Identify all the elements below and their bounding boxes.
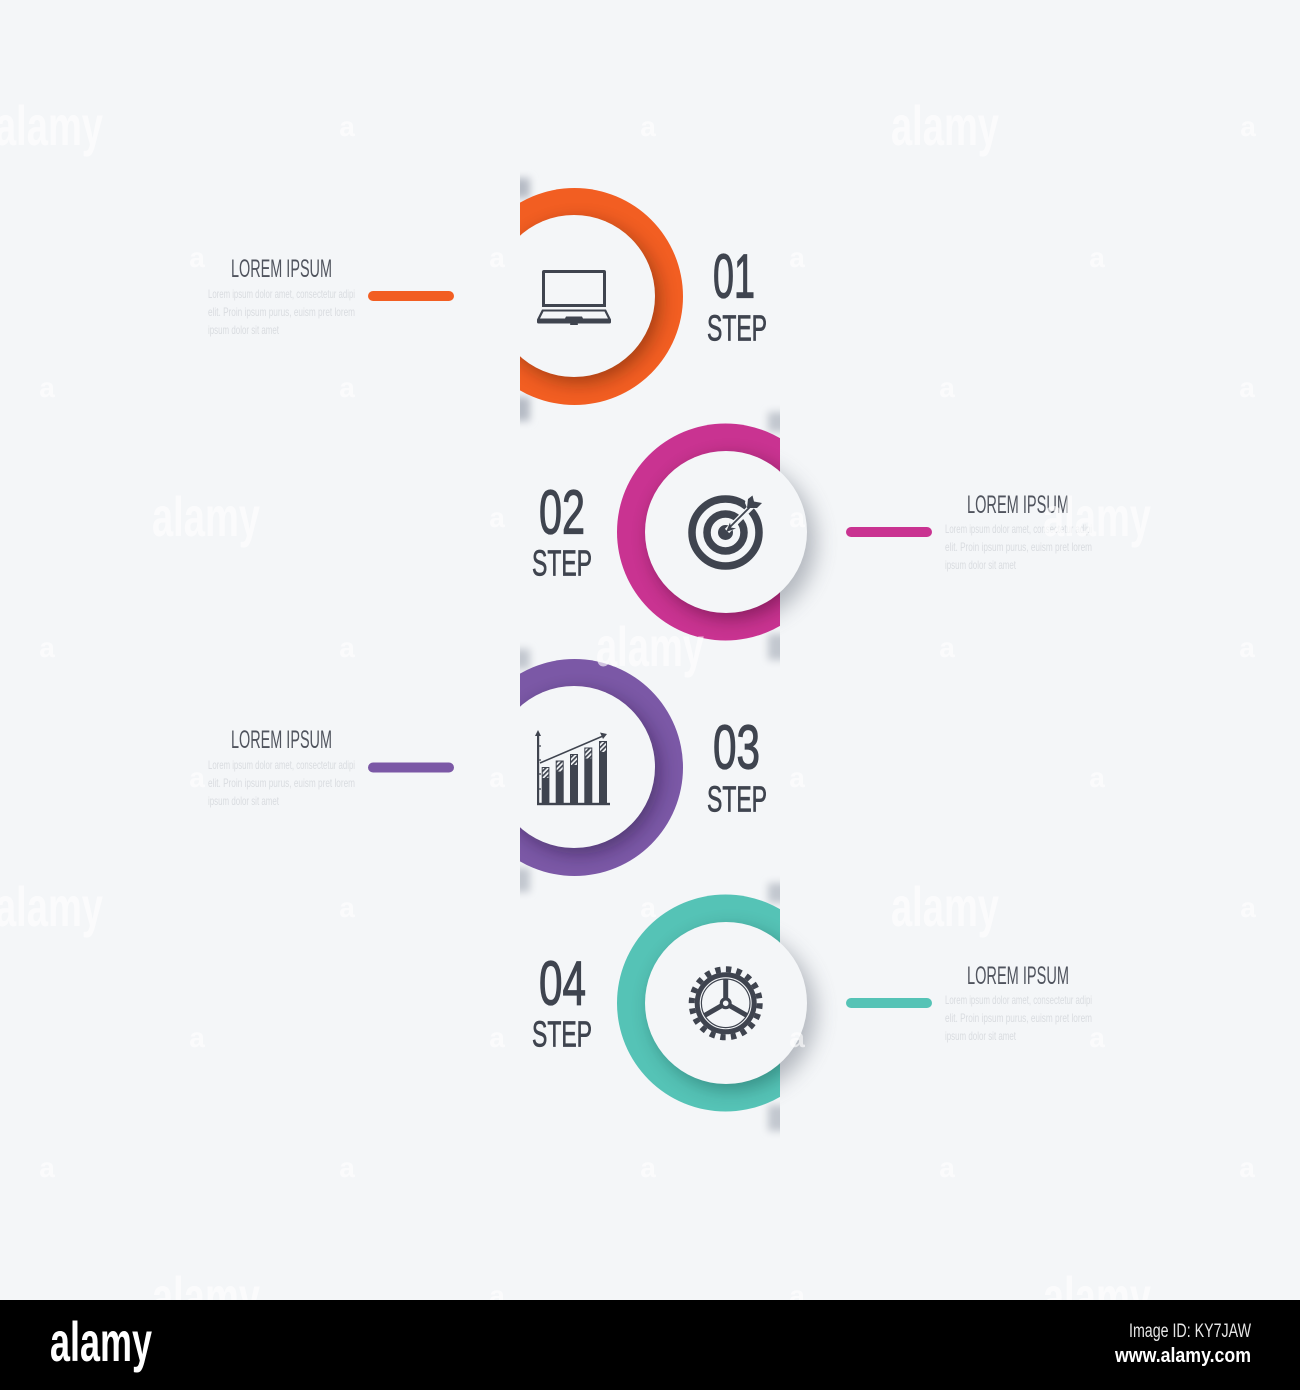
watermarks: a <box>640 111 656 142</box>
text block: title and body: ipsum dolor sit amet <box>208 794 279 808</box>
ring shadow strips <box>520 646 534 896</box>
watermarks: a <box>1240 111 1256 142</box>
watermarks: a <box>39 1152 55 1183</box>
text block: title and body: LOREM IPSUM <box>967 491 1069 519</box>
text block: title and body: elit. Proin ipsum purus, euism pret lorem <box>208 776 355 790</box>
icon: target <box>692 496 762 566</box>
watermarks: a <box>189 762 205 793</box>
watermarks: a <box>339 1152 355 1183</box>
step 4 panel <box>532 883 1092 1131</box>
text block: title and body: LOREM IPSUM <box>231 255 332 283</box>
watermarks: a <box>640 892 656 923</box>
ring shadow strips <box>764 408 780 664</box>
step 1 panel <box>208 178 767 421</box>
watermarks: a <box>339 632 355 663</box>
step label: STEP <box>532 1014 592 1054</box>
white disc <box>493 686 655 848</box>
watermarks: a <box>1239 372 1255 403</box>
text block: title and body: ipsum dolor sit amet <box>208 323 279 337</box>
text block: title and body: ipsum dolor sit amet <box>945 1029 1016 1043</box>
watermarks: a <box>189 242 205 273</box>
watermarks: alamy <box>891 875 999 938</box>
watermarks: a <box>489 762 505 793</box>
footer image id: Image ID: KY7JAW <box>1129 1321 1251 1342</box>
watermarks: a <box>1089 762 1105 793</box>
disc shadow on ring <box>650 928 812 1090</box>
text block: title and body: Lorem ipsum dolor amet, consectetur adipi <box>208 287 355 301</box>
watermarks: a <box>939 632 955 663</box>
ring shadow strips <box>520 174 534 425</box>
watermarks: alamy <box>1043 1265 1151 1328</box>
watermarks: a <box>1089 1022 1105 1053</box>
disc shadow on background <box>780 933 827 1093</box>
text block: title and body: Lorem ipsum dolor amet, consectetur adipi <box>945 993 1092 1007</box>
watermarks: alamy <box>596 615 704 678</box>
icon: laptop <box>537 270 611 325</box>
watermarks: a <box>789 1022 805 1053</box>
text block: title and body: Lorem ipsum dolor amet, consectetur adipi <box>208 758 355 772</box>
text block: title and body: LOREM IPSUM <box>231 726 332 754</box>
text block: title and body <box>208 726 355 808</box>
watermarks: a <box>640 1152 656 1183</box>
text block: title and body <box>945 962 1092 1043</box>
connector bar <box>368 291 454 301</box>
connector bar <box>846 998 932 1008</box>
watermarks: alamy <box>1043 485 1151 548</box>
watermarks: a <box>789 242 805 273</box>
step label: STEP <box>707 778 767 820</box>
magenta ring <box>617 424 780 640</box>
white disc <box>645 922 807 1084</box>
step number 03: 03 <box>713 714 760 782</box>
watermarks: a <box>489 242 505 273</box>
footer bar <box>0 1300 1300 1390</box>
text block: title and body: elit. Proin ipsum purus, euism pret lorem <box>945 540 1092 554</box>
teal ring <box>617 894 780 1112</box>
footer url: www.alamy.com <box>1114 1345 1251 1367</box>
watermarks: a <box>789 502 805 533</box>
watermarks: a <box>1240 892 1256 923</box>
purple ring <box>520 659 683 876</box>
watermarks: a <box>939 372 955 403</box>
step label: STEP <box>532 542 592 584</box>
icon: gear <box>692 969 760 1037</box>
text block: title and body <box>945 491 1092 572</box>
footer logo: alamy <box>50 1310 152 1373</box>
connector bar <box>368 762 454 772</box>
watermarks: a <box>339 892 355 923</box>
text block: title and body: Lorem ipsum dolor amet, consectetur adipi <box>945 522 1092 536</box>
connector bar <box>846 527 932 537</box>
step label: STEP <box>707 308 767 348</box>
watermarks: alamy <box>152 485 260 548</box>
disc shadow <box>498 692 660 854</box>
step 2 panel <box>532 412 1092 660</box>
text block: title and body <box>208 255 355 337</box>
watermarks: a <box>939 1152 955 1183</box>
text block: title and body: elit. Proin ipsum purus, euism pret lorem <box>208 305 355 319</box>
watermarks: a <box>39 632 55 663</box>
white disc <box>645 451 807 613</box>
watermarks: a <box>789 762 805 793</box>
watermarks: a <box>1089 242 1105 273</box>
orange ring <box>520 188 683 405</box>
step number 01: 01 <box>713 242 755 312</box>
watermarks: a <box>1239 1152 1255 1183</box>
disc shadow <box>498 221 660 383</box>
ring shadow strips <box>764 880 780 1134</box>
watermarks: a <box>39 372 55 403</box>
watermarks: alamy <box>891 94 999 157</box>
white disc <box>493 215 655 377</box>
watermarks: a <box>789 1280 805 1311</box>
watermarks: a <box>189 1022 205 1053</box>
disc shadow on background <box>780 462 827 622</box>
step number 04: 04 <box>539 950 586 1018</box>
text block: title and body: elit. Proin ipsum purus, euism pret lorem <box>945 1011 1092 1025</box>
watermarks: a <box>339 372 355 403</box>
watermarks: a <box>339 111 355 142</box>
watermarks: a <box>489 1280 505 1311</box>
watermarks: a <box>489 1022 505 1053</box>
icon: bar chart <box>535 730 610 805</box>
text block: title and body: ipsum dolor sit amet <box>945 558 1016 572</box>
text block: title and body: LOREM IPSUM <box>967 962 1069 990</box>
watermarks: alamy <box>152 1265 260 1328</box>
step number 02: 02 <box>539 478 585 548</box>
watermarks: a <box>1239 632 1255 663</box>
watermarks: a <box>489 502 505 533</box>
step 3 panel <box>208 649 767 892</box>
disc shadow on ring <box>650 457 812 619</box>
